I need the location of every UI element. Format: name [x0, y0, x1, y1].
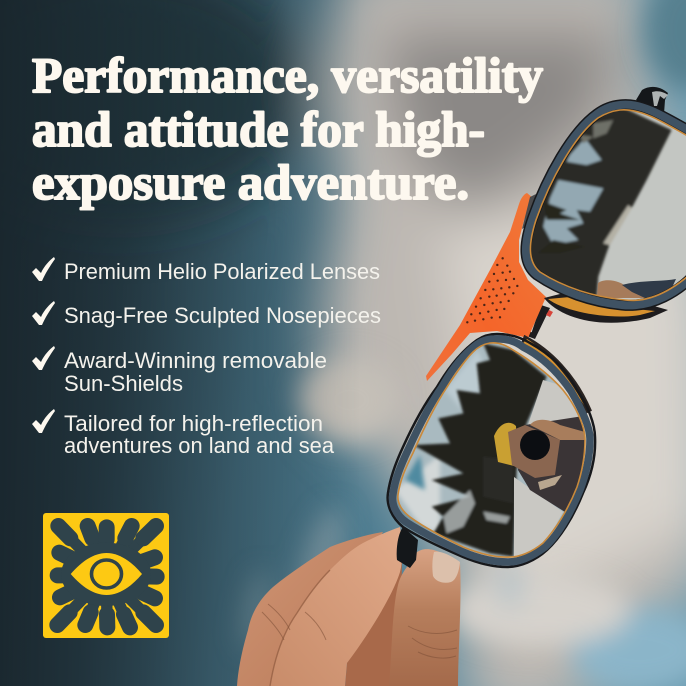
title: exposure adventure.: [32, 154, 469, 210]
upper lens reflection: [531, 110, 686, 300]
hand: crease between fingers: [270, 570, 330, 686]
lower lens outer orange rim: [522, 337, 590, 412]
upper lens underside rim: [544, 294, 668, 323]
hand: thumb: [389, 549, 461, 686]
lower lens: [388, 334, 595, 567]
hand: [237, 527, 461, 686]
title: and attitude for high-: [32, 101, 485, 157]
item: sun-shields: Award-Winning removable: [64, 348, 327, 373]
hand: thumb nail: [432, 552, 460, 583]
item: high-reflection adventures: Tailored for high-reflection: [64, 411, 323, 436]
hand: index finger: [270, 527, 402, 686]
hand: curled finger: [345, 560, 402, 686]
orange nosepiece with perforations: [426, 193, 546, 381]
lower temple pad: [397, 527, 418, 568]
title: Performance, versatility: [32, 47, 543, 103]
reflected person: [518, 415, 590, 512]
bridge rods: [527, 305, 553, 339]
item: sun-shields: [32, 346, 327, 396]
item: nosepieces: Snag-Free Sculpted Nosepieces: [64, 303, 381, 328]
item: sun-shields: Sun-Shields: [64, 371, 183, 396]
hand: knuckle creases: [262, 604, 457, 658]
perforation dots: [466, 257, 519, 324]
feature list: [32, 257, 381, 458]
item: polarized lenses: Premium Helio Polarized Lenses: [64, 259, 380, 284]
temple hinge top: [636, 87, 668, 114]
logo: sun eye: [43, 513, 169, 638]
hand: back finger: [237, 532, 383, 686]
upper lens: [520, 87, 686, 310]
title: [32, 47, 543, 210]
eye: [71, 553, 142, 595]
item: high-reflection adventures: [32, 409, 335, 458]
item: high-reflection adventures: adventures on land and sea: [64, 433, 335, 458]
lower lens reflection: [398, 344, 584, 556]
sunglasses: [237, 87, 686, 686]
